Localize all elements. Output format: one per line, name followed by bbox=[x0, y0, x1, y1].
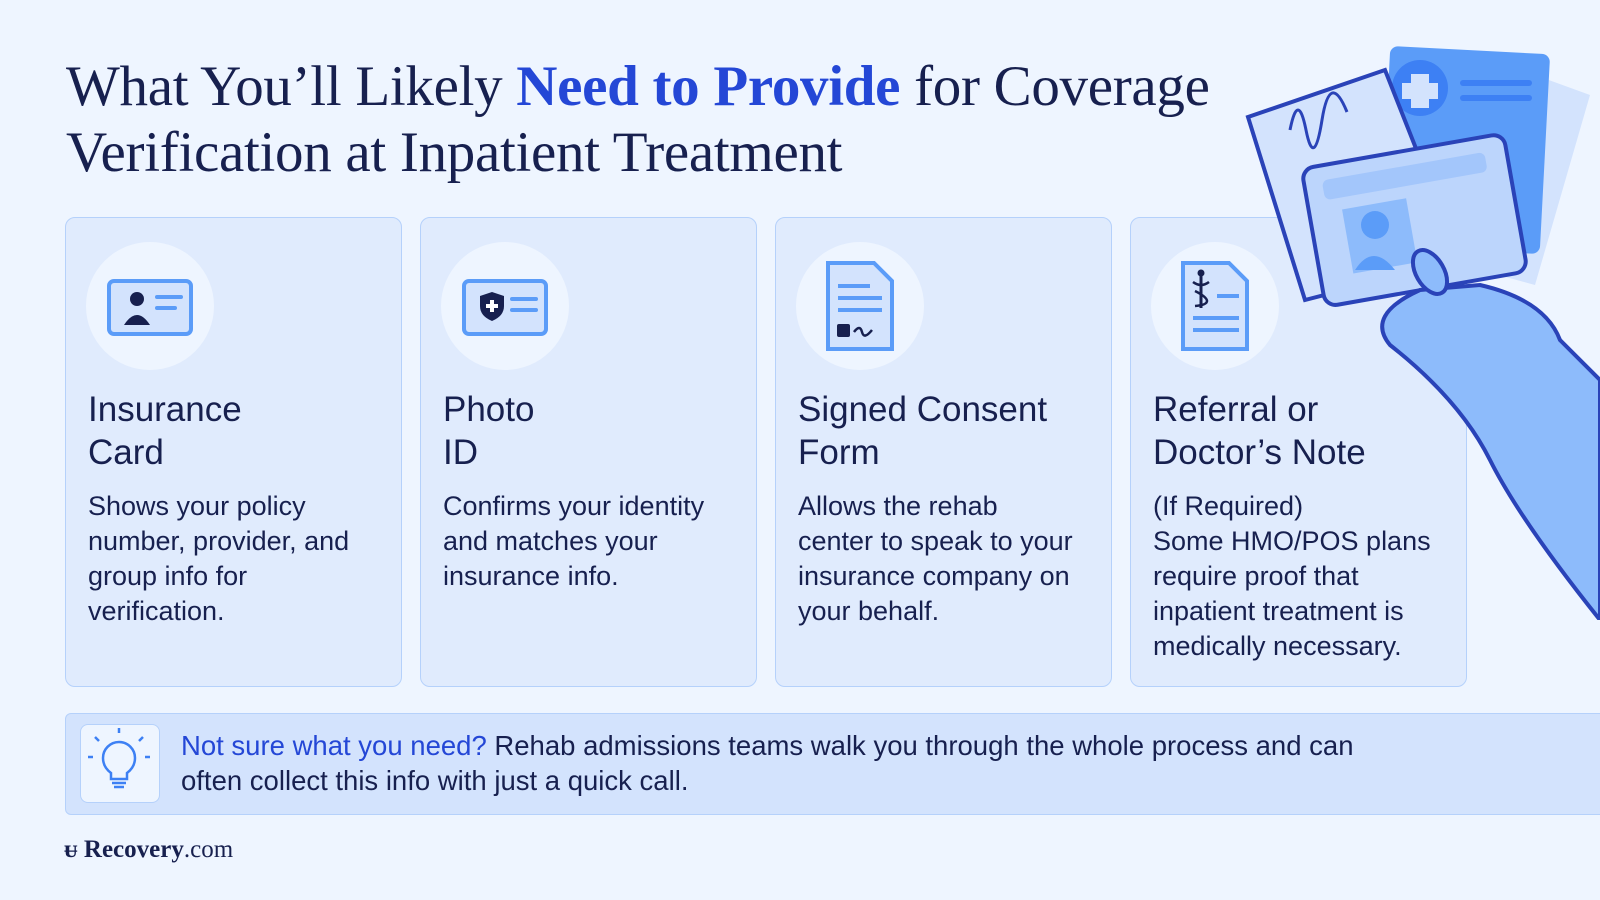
body text: Allows the rehab bbox=[798, 491, 998, 521]
body text: verification. bbox=[88, 596, 225, 626]
body text: medically necessary. bbox=[1153, 631, 1402, 661]
body text: insurance info. bbox=[443, 561, 619, 591]
body text: group info for bbox=[88, 561, 247, 591]
body text bbox=[88, 491, 349, 626]
card: insurance card bbox=[65, 217, 402, 687]
heading bbox=[88, 390, 242, 472]
body text: center to speak to your bbox=[798, 526, 1073, 556]
tip text: Not sure what you need? Rehab admissions teams walk you through the whole process and can bbox=[181, 730, 1353, 761]
body text: number, provider, and bbox=[88, 526, 349, 556]
icon: insurance card bbox=[86, 242, 214, 370]
body text: Shows your policy bbox=[88, 491, 306, 521]
tip text bbox=[181, 730, 1353, 796]
callout: tip bbox=[65, 713, 1600, 815]
logo: ᵾ Recovery.com bbox=[64, 836, 233, 863]
body text: Some HMO/POS plans bbox=[1153, 526, 1431, 556]
card: photo id bbox=[420, 217, 757, 687]
body text: your behalf. bbox=[798, 596, 939, 626]
title bbox=[66, 55, 1210, 184]
heading: Card bbox=[88, 433, 164, 472]
heading bbox=[798, 390, 1047, 472]
body text bbox=[1153, 491, 1431, 661]
card: referral bbox=[1130, 217, 1467, 687]
body text: Confirms your identity bbox=[443, 491, 704, 521]
heading: Form bbox=[798, 433, 880, 472]
body text bbox=[798, 491, 1073, 626]
tip text: often collect this info with just a quick call. bbox=[181, 765, 688, 796]
title: Verification at Inpatient Treatment bbox=[66, 121, 842, 184]
heading: Insurance bbox=[88, 390, 242, 429]
heading: ID bbox=[443, 433, 478, 472]
heading: Referral or bbox=[1153, 390, 1318, 429]
heading: Doctor’s Note bbox=[1153, 433, 1366, 472]
icon: shield id bbox=[441, 242, 569, 370]
icon: lightbulb bbox=[80, 724, 160, 803]
icon: signed document bbox=[796, 242, 924, 370]
body text: (If Required) bbox=[1153, 491, 1303, 521]
body text: and matches your bbox=[443, 526, 658, 556]
icon: medical note bbox=[1151, 242, 1279, 370]
heading bbox=[443, 390, 534, 472]
body text: require proof that bbox=[1153, 561, 1359, 591]
illustration: hand holding cards bbox=[1246, 46, 1600, 620]
title: What You’ll Likely Need to Provide for Coverage bbox=[66, 55, 1210, 118]
heading: Photo bbox=[443, 390, 534, 429]
body text: insurance company on bbox=[798, 561, 1070, 591]
heading: Signed Consent bbox=[798, 390, 1047, 429]
body text bbox=[443, 491, 704, 591]
card: consent form bbox=[775, 217, 1112, 687]
heading bbox=[1153, 390, 1366, 472]
body text: inpatient treatment is bbox=[1153, 596, 1404, 626]
